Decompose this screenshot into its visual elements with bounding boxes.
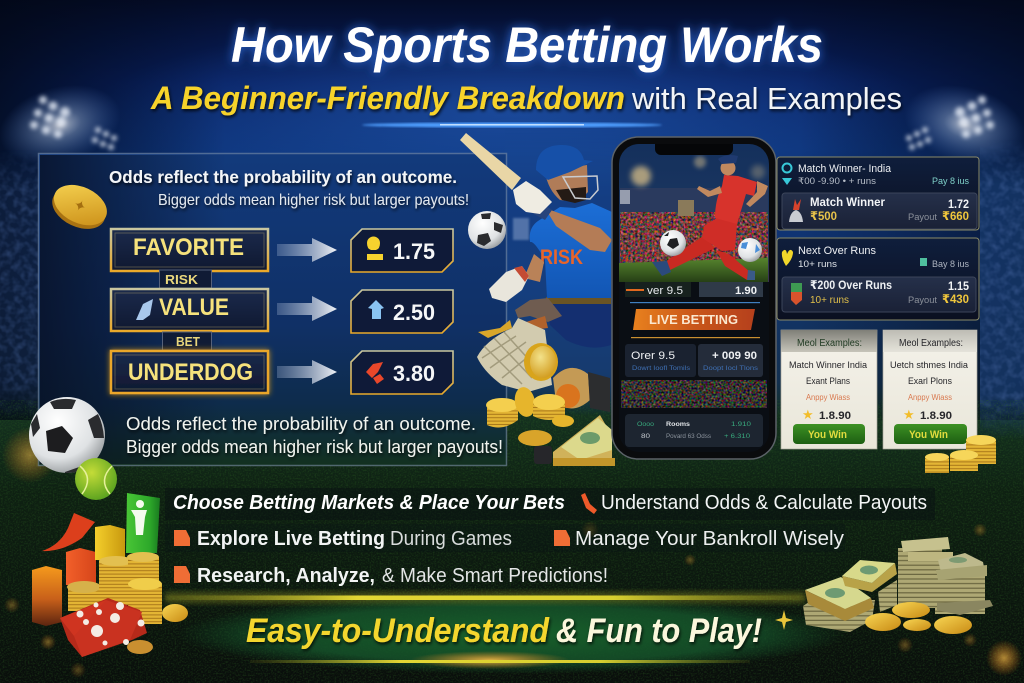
illustration: charts and dice: [32, 493, 188, 657]
arrow: favorite to 1.75: [277, 238, 337, 262]
closing text: Bigger odds mean higher risk but larger payouts!: [126, 437, 503, 457]
cricket bat: [460, 133, 521, 190]
card: example one: 1.8.90: [819, 410, 851, 422]
card: example two: 1.8.90: [920, 410, 952, 422]
icon: tennis ball: [75, 458, 117, 500]
icon: bullet: [174, 530, 190, 546]
bet slip summary: 1.910: [731, 421, 751, 428]
button: you win: You Win: [909, 429, 948, 441]
button: you win: You Win: [808, 429, 847, 441]
illustration: money and coins: [803, 537, 993, 634]
inner bet row: Payout: [908, 212, 938, 222]
tagline green band: [177, 594, 847, 674]
forearm lower: [524, 254, 544, 282]
standing leg: [716, 250, 750, 280]
cricket pad: [477, 318, 552, 392]
feature: research: & Make Smart Predictions!: [382, 565, 608, 587]
panel: next over runs bet: Next Over Runs: [798, 245, 876, 257]
illustration: cricket batsman: RISK: [540, 246, 583, 269]
card: example two: Exarl Plons: [908, 376, 952, 386]
icon: gold coin: ✦: [70, 196, 89, 217]
feature: choose betting markets: Choose Betting Markets & Place Your Bets: [173, 492, 565, 514]
subtitle: A Beginner-Friendly Breakdown: [150, 80, 625, 116]
tall stack: [898, 548, 942, 608]
phone screen: stadium image: [619, 144, 769, 282]
inner bet row: [782, 193, 977, 229]
player in red: [652, 155, 768, 280]
inner bet row: 1.72: [948, 197, 969, 211]
icon: yellow heart: [782, 250, 793, 266]
gold divider top: [165, 592, 805, 603]
feature: explore live betting: Explore Live Betting: [197, 528, 385, 550]
betting option tiles: + 009 90: [712, 350, 757, 362]
money: [553, 415, 612, 466]
tagline: Easy-to-Understand: [246, 612, 550, 650]
feature: research: [197, 565, 608, 587]
card: example two: Meol Examples:: [899, 338, 963, 349]
inner bet row: Payout: [908, 295, 938, 305]
card: example one: [781, 330, 877, 449]
bet slip summary: [625, 414, 763, 447]
card: example one: Match Winner India: [789, 360, 867, 370]
bat handle: [534, 446, 552, 464]
inner bet row: 10+ runs: [810, 294, 849, 306]
live betting banner: [630, 302, 760, 338]
card: example one: Meol Examples:: [797, 338, 862, 349]
label: favorite: FAVORITE: [133, 234, 244, 261]
tag: bet: [162, 332, 212, 350]
bet slip summary: 80: [641, 433, 650, 440]
jersey with RISK: [530, 203, 617, 298]
odds box 3.80: [351, 351, 453, 394]
gold divider bottom: [250, 651, 750, 669]
closing text: [126, 414, 503, 457]
icon: phone mark: [581, 493, 597, 514]
label: favorite: [111, 229, 268, 271]
chili arrow: [42, 513, 95, 551]
tag: risk: [160, 270, 212, 288]
trousers and belt: [547, 303, 611, 348]
brown cloth gloves: [515, 298, 562, 322]
icon: gold coin: [46, 177, 113, 237]
odds box 2.50: [351, 290, 453, 333]
odds box 2.50: 2.50: [393, 300, 435, 325]
odds box 3.80: 3.80: [393, 361, 435, 386]
bill stack left: [803, 600, 875, 632]
crowd strip: [621, 380, 767, 408]
label: underdog: UNDERDOG: [128, 359, 253, 386]
torso: [715, 175, 757, 224]
panel: odds explained: [38, 154, 506, 466]
feature: manage bankroll: Manage Your Bankroll Wisely: [575, 528, 844, 550]
betting option tiles: Dowrt Ioofl Tomils: [632, 365, 691, 372]
card: example two: [883, 330, 977, 449]
card: example one: ★: [802, 407, 814, 422]
batting glove low: [489, 266, 529, 302]
feature: explore live betting: [197, 528, 512, 550]
screen row: over 9.5: 1.90: [735, 285, 757, 297]
head and cap: [720, 160, 736, 176]
inner bet row: ₹660: [942, 209, 969, 223]
subtitle: with Real Examples: [631, 81, 902, 116]
betting option tiles: Orer 9.5: [631, 350, 675, 362]
icon: trophy: [367, 237, 383, 260]
helmet and orange ball: [553, 368, 590, 409]
coins beside cards: [925, 435, 996, 473]
icon: bullet: [554, 530, 570, 546]
card: example two: Uetch sthmes India: [890, 360, 968, 370]
icons: match winner row: [782, 164, 792, 185]
tag: bet: BET: [176, 334, 200, 349]
raised arm: [545, 208, 612, 252]
panel: next over runs bet: 10+ runs: [798, 259, 837, 270]
inner bet row: ₹500: [810, 209, 837, 223]
inner bet row: ₹430: [942, 292, 969, 306]
phone: [612, 137, 776, 459]
coin stacks: [487, 399, 518, 428]
ball on pitch: [660, 230, 686, 256]
bet slip summary: Povard 63 Odss: [666, 433, 712, 440]
title divider glow: [362, 122, 662, 128]
intro text: [109, 167, 469, 209]
bet slip summary: + 6.310: [724, 433, 750, 440]
odds box 1.75: 1.75: [393, 239, 435, 264]
raised glove: [513, 181, 552, 214]
arrow: value to 2.50: [277, 296, 337, 321]
arrow: underdog to 3.80: [277, 360, 337, 384]
panel: match winner bet: Pay 8 ius: [932, 176, 969, 186]
inner bet row: [782, 277, 976, 312]
kicking leg: [665, 236, 715, 270]
label: underdog: [111, 351, 268, 393]
card: example one: Anppy Wiass: [806, 393, 850, 402]
odds box 1.75: [351, 229, 453, 272]
label: value: VALUE: [159, 294, 229, 321]
card: example two: ★: [903, 407, 915, 422]
card: example one: Exant Plans: [806, 376, 850, 386]
icon: value shuttle: [136, 299, 153, 320]
screen row: over 9.5: [625, 282, 763, 297]
title: How Sports Betting Works: [231, 17, 823, 73]
chart bars: [32, 566, 62, 626]
notch: [655, 144, 733, 155]
feature list band: [165, 488, 935, 587]
right stack: [935, 572, 985, 614]
coin stacks: [68, 587, 101, 611]
panel: match winner bet: Match Winner- India: [798, 163, 892, 175]
tag: risk: RISK: [165, 272, 199, 287]
illustration: cricket batsman: [460, 133, 617, 466]
gold coins: [892, 602, 930, 618]
bet slip summary: Oooo: [637, 421, 654, 428]
card: example two: Anppy Wiass: [908, 393, 952, 402]
second ball: [738, 238, 762, 262]
feature: research: Research, Analyze,: [197, 565, 375, 587]
sparkle: [775, 610, 793, 630]
shorts: [702, 216, 737, 251]
arms: [746, 181, 768, 207]
inner bet row: 1.15: [948, 279, 969, 293]
inner bet row: Match Winner: [810, 195, 885, 209]
gold medal coin: [524, 343, 558, 381]
icon: red down mark: [366, 362, 384, 384]
screen row: over 9.5: ver 9.5: [647, 285, 683, 297]
feature: explore live betting: During Games: [390, 528, 512, 550]
bill stack upper: [842, 563, 897, 592]
feature: understand odds: Understand Odds & Calculate Payouts: [601, 492, 927, 514]
intro text: Odds reflect the probability of an outcome.: [109, 167, 457, 187]
tagline: [246, 612, 762, 650]
red dice: [60, 598, 147, 657]
head and helmet: [545, 165, 588, 202]
betting option tiles: [625, 344, 763, 377]
subtitle: [150, 80, 902, 116]
panel: match winner bet: [777, 157, 979, 230]
icon: small soccer ball: [468, 211, 506, 249]
intro text: Bigger odds mean higher risk but larger payouts!: [158, 192, 469, 209]
betting option tiles: Doopt Iocl Tlons: [703, 365, 759, 372]
panel: match winner bet: ₹00 -9.90 • + runs: [798, 176, 877, 186]
icon: soccer ball: [29, 397, 105, 473]
closing text: Odds reflect the probability of an outcome.: [126, 414, 476, 434]
icon: bullet: [174, 566, 190, 583]
inner bet row: ₹200 Over Runs: [810, 278, 892, 292]
panel: next over runs bet: [777, 238, 979, 320]
tagline: & Fun to Play!: [556, 612, 762, 650]
live betting banner: LIVE BETTING: [649, 312, 738, 327]
icon: up arrow: [368, 300, 384, 319]
label: value: [111, 289, 268, 331]
panel: next over runs bet: Bay 8 ius: [932, 259, 969, 269]
bet slip summary: Rooms: [666, 421, 690, 428]
